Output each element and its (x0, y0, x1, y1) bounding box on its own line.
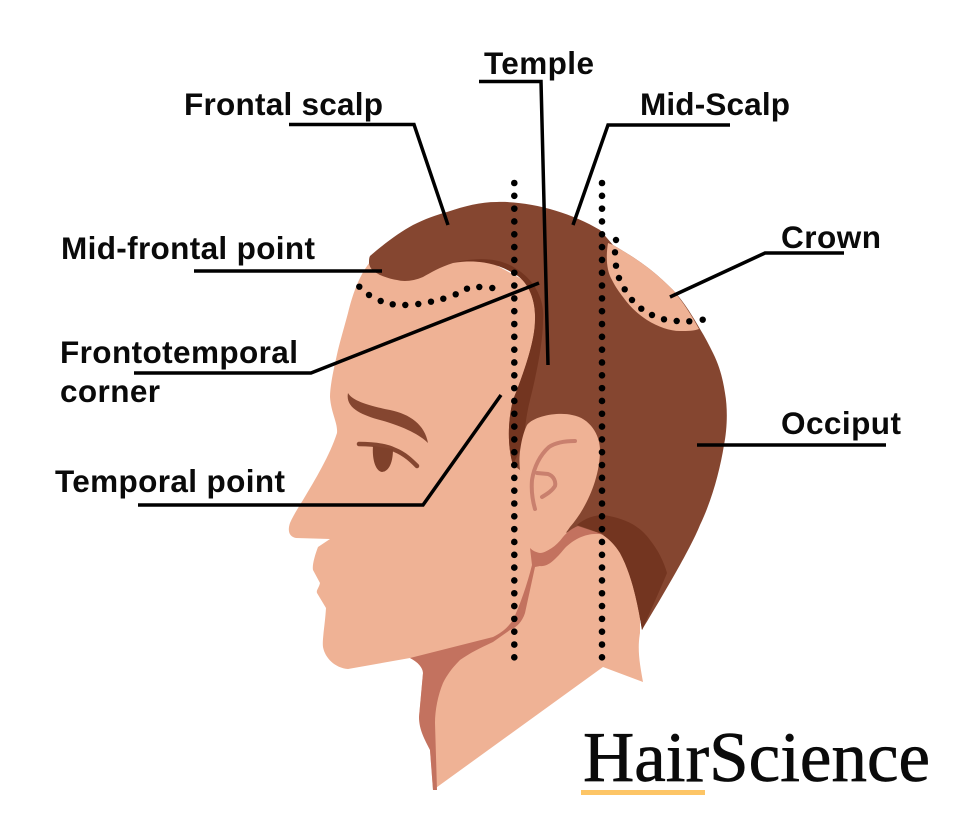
label: Occiput: Occiput (781, 405, 902, 441)
label: Crown (670, 219, 881, 297)
face and neck skin (289, 240, 643, 790)
dotted line: crown (612, 237, 706, 324)
head illustration (289, 202, 727, 790)
sideburn shadow (455, 259, 543, 465)
dotted line: front vertical (511, 183, 518, 660)
label: Mid-Scalp (573, 86, 790, 225)
label: Mid-Scalp: Mid-Scalp (640, 86, 790, 122)
logo: HairScience: HairScience (583, 719, 930, 797)
eye (359, 444, 417, 472)
logo underline (581, 790, 705, 795)
eyebrow (348, 393, 428, 443)
nape shadow (577, 515, 667, 630)
label: Mid-frontal point: Mid-frontal point (61, 230, 316, 266)
bald crown (607, 243, 699, 331)
dotted line: rear vertical (599, 183, 605, 660)
jaw and neck shadow (410, 526, 605, 790)
dotted line: hairline (356, 284, 495, 308)
label: Crown: Crown (781, 219, 881, 255)
label: Temple: Temple (484, 45, 594, 81)
label: Frontotemporal corner (60, 283, 539, 409)
label: Temple (479, 45, 594, 365)
inner ear (532, 441, 575, 509)
label: Temporal point: Temporal point (55, 463, 286, 499)
label: Frontal scalp: Frontal scalp (184, 86, 383, 122)
label: Frontal scalp (184, 86, 448, 225)
label: Temporal point (55, 395, 501, 505)
hair (369, 202, 727, 630)
ear (519, 414, 600, 553)
label: Frontotemporal corner: corner (60, 373, 160, 409)
label: Frontotemporal corner: Frontotemporal (60, 334, 298, 370)
